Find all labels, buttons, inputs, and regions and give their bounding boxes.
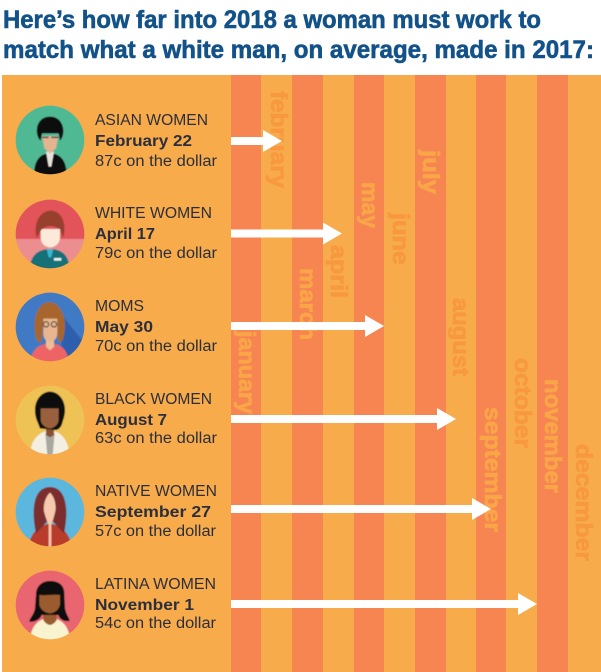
text: moms: May 30 — [95, 319, 153, 336]
month labels — [234, 91, 597, 561]
text: moms: MOMS — [95, 298, 144, 315]
text: native women: NATIVE WOMEN — [95, 483, 217, 500]
icon: native woman avatar — [16, 478, 84, 546]
text: moms: 70c on the dollar — [95, 338, 217, 355]
month labels: december — [571, 444, 597, 561]
text: asian women: 87c on the dollar — [95, 153, 217, 170]
arrow: white women — [231, 222, 342, 244]
month labels: march — [295, 268, 321, 340]
text: latina women: November 1 — [95, 597, 194, 614]
text: native women: September 27 — [95, 504, 211, 521]
icon: mom avatar — [16, 292, 84, 362]
text: black women — [95, 391, 217, 447]
text: latina women — [95, 576, 216, 632]
month labels: august — [448, 298, 474, 376]
arrow: asian women — [231, 130, 282, 152]
month labels: june — [388, 212, 414, 265]
month labels: july — [418, 149, 444, 194]
text: native women — [95, 483, 217, 540]
arrow: black women — [231, 408, 456, 430]
month labels: february — [266, 91, 292, 188]
icon: latina woman avatar — [16, 570, 84, 640]
text: black women: 63c on the dollar — [95, 430, 217, 447]
text: latina women: 54c on the dollar — [95, 615, 216, 632]
month stripes — [231, 75, 568, 672]
title — [3, 6, 594, 64]
arrow: latina women — [231, 593, 537, 615]
icon: white woman avatar — [16, 200, 84, 268]
text: black women: BLACK WOMEN — [95, 391, 212, 408]
icon: asian woman avatar — [16, 106, 84, 174]
text: white women: 79c on the dollar — [95, 245, 217, 262]
icon: black woman avatar — [16, 386, 84, 454]
text: moms — [95, 298, 217, 355]
month labels: april — [326, 245, 352, 298]
text: white women: April 17 — [95, 226, 155, 243]
text: asian women: ASIAN WOMEN — [95, 112, 208, 129]
text: black women: August 7 — [95, 412, 167, 429]
text: asian women — [95, 112, 217, 170]
title: match what a white man, on average, made in 2017: — [3, 36, 594, 64]
text: native women: 57c on the dollar — [95, 523, 216, 540]
text: white women: WHITE WOMEN — [95, 205, 212, 222]
month labels: november — [540, 379, 566, 493]
month labels: january — [234, 330, 260, 414]
text: asian women: February 22 — [95, 133, 192, 150]
month labels: may — [357, 182, 383, 228]
month labels: october — [510, 358, 536, 448]
title: Here’s how far into 2018 a woman must work to — [3, 6, 541, 34]
arrow: moms — [231, 315, 384, 337]
text: white women — [95, 205, 217, 262]
text: latina women: LATINA WOMEN — [95, 576, 216, 593]
arrow: native women — [231, 498, 491, 520]
month labels: september — [480, 407, 506, 532]
